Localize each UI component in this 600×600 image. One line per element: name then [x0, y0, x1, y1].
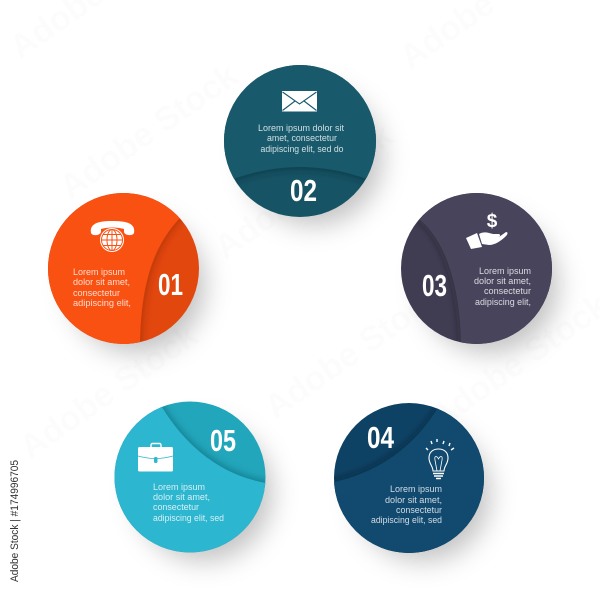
text: 04 body: Lorem ipsum [390, 484, 442, 494]
text: 02 body: Lorem ipsum dolor sit [258, 123, 344, 133]
text: 05 body: Lorem ipsum [153, 482, 205, 492]
icon: phone with globe [91, 221, 134, 252]
text: 05 body: consectetur [153, 502, 199, 512]
text: 01 body: consectetur [73, 288, 120, 298]
text: 01 body [73, 267, 131, 308]
icon: envelope [282, 91, 317, 112]
number 05: 05 [210, 423, 236, 458]
text: 01 body: adipiscing elit, [73, 298, 131, 308]
text: 05 body [153, 482, 224, 523]
text: 04 body: consectetur [396, 505, 442, 515]
number 04: 04 [367, 420, 395, 455]
text: 02 body [258, 123, 344, 154]
text: 01 body: Lorem ipsum [73, 267, 125, 277]
text: 05 body: adipiscing elit, sed [153, 513, 224, 523]
watermark: Adobe Stock [258, 276, 450, 427]
text: 04 body [371, 484, 442, 525]
text: 03 body: dolor sit amet, [474, 276, 531, 286]
text: 01 body: dolor sit amet, [73, 277, 130, 287]
text: 04 body: adipiscing elit, sed [371, 515, 442, 525]
watermark: Adobe Stock [208, 116, 400, 267]
panel: 01 orange circle [48, 193, 199, 344]
side credit text: Adobe Stock | #174996705 [9, 460, 21, 582]
panel: 03 slate circle [401, 193, 552, 344]
icon: light bulb [426, 439, 454, 478]
watermark [3, 0, 600, 467]
icon: hand with dollar [466, 211, 508, 249]
circle shadows [69, 89, 558, 561]
text: 03 body: consectetur [484, 286, 531, 296]
icon: hand with dollar: $ [487, 211, 498, 232]
text: 05 body: dolor sit amet, [153, 492, 210, 502]
icon: briefcase [138, 444, 173, 472]
number 03: 03 [422, 268, 447, 303]
text: 03 body: adipiscing elit, [475, 297, 531, 307]
panel: 05 cyan circle [114, 402, 266, 552]
watermark: Adobe Stock [53, 56, 245, 207]
panel: 04 navy circle [334, 403, 484, 553]
number 02: 02 [290, 173, 317, 208]
watermark: Adobe Stock [13, 316, 205, 467]
panel: 02 teal circle [224, 65, 376, 217]
text: 03 body [474, 266, 531, 307]
text: 03 body: Lorem ipsum [479, 266, 531, 276]
text: 04 body: dolor sit amet, [385, 495, 442, 505]
text: 02 body: amet, consectetur [267, 133, 337, 143]
number 01: 01 [158, 267, 183, 302]
text: 02 body: adipiscing elit, sed do [260, 144, 344, 154]
